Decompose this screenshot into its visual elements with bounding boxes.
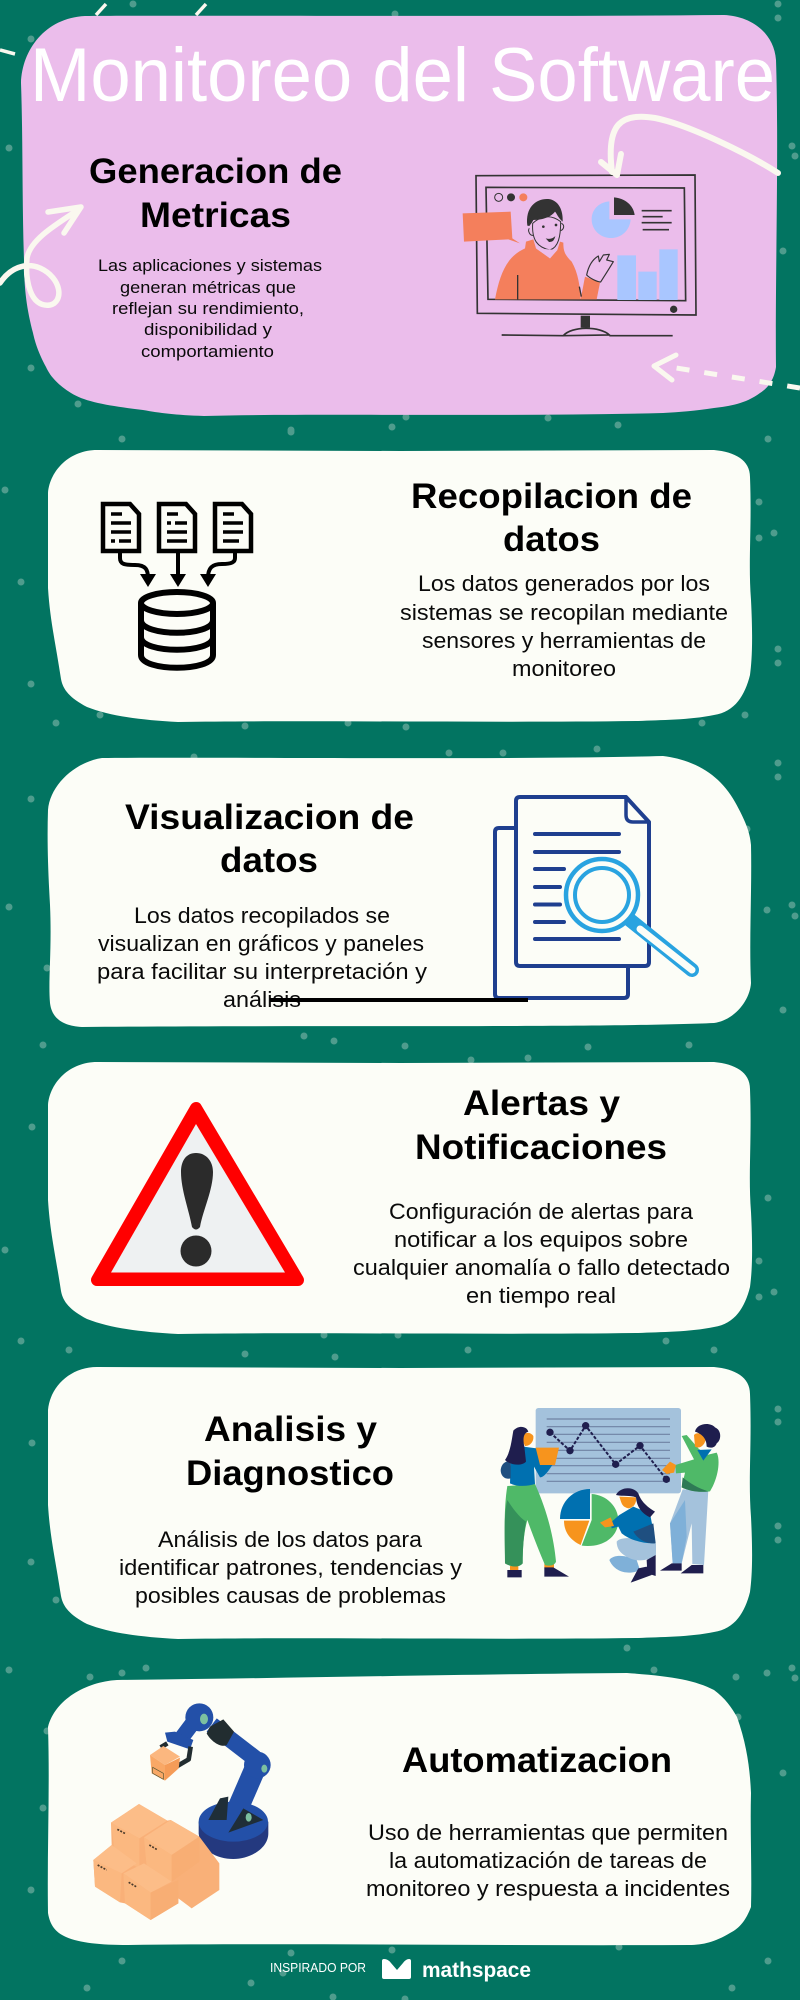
text block: automatizacion: Uso de herramientas que permiten bbox=[368, 1820, 728, 1845]
text block: generacion de metricas: disponibilidad y bbox=[144, 320, 273, 339]
text block: recopilacion de datos bbox=[400, 571, 728, 681]
text block: visualizacion de datos: para facilitar su interpretación y bbox=[97, 959, 427, 984]
text block: recopilacion de datos: sensores y herramientas de bbox=[422, 628, 706, 653]
heading: recopilacion de datos: Recopilacion de bbox=[411, 477, 692, 516]
heading: analisis y diagnostico: Diagnostico bbox=[186, 1454, 394, 1493]
text block: generacion de metricas: comportamiento bbox=[141, 342, 274, 361]
heading: visualizacion de datos bbox=[125, 798, 414, 880]
arrow: curved arrow top right bbox=[601, 117, 778, 175]
panel: visualizacion de datos bbox=[48, 756, 751, 1027]
text block: visualizacion de datos: Los datos recopilados se bbox=[134, 903, 390, 928]
heading: generacion de metricas: Generacion de bbox=[89, 152, 342, 191]
heading: automatizacion: Automatizacion bbox=[402, 1741, 672, 1780]
heading: generacion de metricas bbox=[89, 152, 342, 235]
text block: alertas y notificaciones bbox=[353, 1199, 730, 1308]
illustration: team analysing charts bbox=[501, 1408, 720, 1583]
heading: generacion de metricas: Metricas bbox=[140, 196, 291, 235]
text block: visualizacion de datos bbox=[97, 903, 427, 1012]
heading: alertas y notificaciones bbox=[415, 1084, 667, 1167]
heading: analisis y diagnostico: Analisis y bbox=[204, 1410, 378, 1449]
line under analisis bbox=[270, 998, 528, 1002]
text block: alertas y notificaciones: cualquier anomalía o fallo detectado bbox=[353, 1255, 730, 1280]
text block: automatizacion bbox=[366, 1820, 730, 1901]
text block: alertas y notificaciones: notificar a los equipos sobre bbox=[394, 1227, 688, 1252]
logo wordmark: mathspace bbox=[422, 1959, 531, 1982]
text block: recopilacion de datos: sistemas se recopilan mediante bbox=[400, 600, 728, 625]
arrow: looping arrow left bbox=[0, 207, 81, 305]
illustration: robot arm stacking boxes bbox=[93, 1703, 271, 1920]
text block: generacion de metricas: generan métricas que bbox=[120, 278, 296, 297]
panel: alertas y notificaciones bbox=[48, 1062, 752, 1334]
text block: analisis y diagnostico: posibles causas de problemas bbox=[135, 1583, 446, 1608]
text block: visualizacion de datos: visualizan en gráficos y paneles bbox=[98, 931, 424, 956]
heading: alertas y notificaciones: Notificaciones bbox=[415, 1128, 667, 1167]
heading: recopilacion de datos bbox=[411, 477, 692, 559]
text block: alertas y notificaciones: en tiempo real bbox=[466, 1283, 616, 1308]
text block: analisis y diagnostico: Análisis de los datos para bbox=[158, 1527, 423, 1552]
footer: inspirado por mathspace: INSPIRADO POR bbox=[270, 1960, 366, 1975]
arrow: dashed arrow lower right bbox=[654, 355, 800, 388]
heading: visualizacion de datos: datos bbox=[220, 841, 318, 880]
text block: alertas y notificaciones: Configuración de alertas para bbox=[389, 1199, 694, 1224]
text block: automatizacion: monitoreo y respuesta a incidentes bbox=[366, 1876, 730, 1901]
footer: inspirado por mathspace bbox=[270, 1959, 531, 1982]
panel: generacion de metricas bbox=[21, 15, 777, 416]
text block: recopilacion de datos: Los datos generados por los bbox=[418, 571, 710, 596]
text block: analisis y diagnostico: identificar patrones, tendencias y bbox=[119, 1555, 462, 1580]
text block: automatizacion: la automatización de tareas de bbox=[389, 1848, 707, 1873]
text block: generacion de metricas: Las aplicaciones y sistemas bbox=[98, 256, 322, 275]
icon: documents flowing into database bbox=[103, 504, 251, 668]
title: Monitoreo del Software bbox=[30, 33, 775, 118]
icon: monitor with presenter bbox=[463, 175, 696, 336]
text block: analisis y diagnostico bbox=[119, 1527, 462, 1608]
panel: automatizacion bbox=[48, 1673, 751, 1945]
text block: generacion de metricas: reflejan su rendimiento, bbox=[112, 299, 304, 318]
text block: recopilacion de datos: monitoreo bbox=[512, 656, 616, 681]
text block: generacion de metricas bbox=[98, 256, 322, 361]
decorative ticks top bbox=[0, 4, 206, 54]
icon: document with magnifier bbox=[495, 797, 692, 998]
panel: recopilacion de datos bbox=[48, 450, 752, 722]
heading: alertas y notificaciones: Alertas y bbox=[463, 1084, 621, 1123]
panel: analisis y diagnostico bbox=[48, 1367, 752, 1639]
heading: analisis y diagnostico bbox=[186, 1410, 394, 1493]
text block: visualizacion de datos: análisis bbox=[223, 987, 301, 1012]
icon: mathspace logo bbox=[382, 1959, 411, 1979]
heading: visualizacion de datos: Visualizacion de bbox=[125, 798, 414, 837]
heading: recopilacion de datos: datos bbox=[503, 520, 600, 559]
icon: warning triangle bbox=[97, 1108, 298, 1280]
